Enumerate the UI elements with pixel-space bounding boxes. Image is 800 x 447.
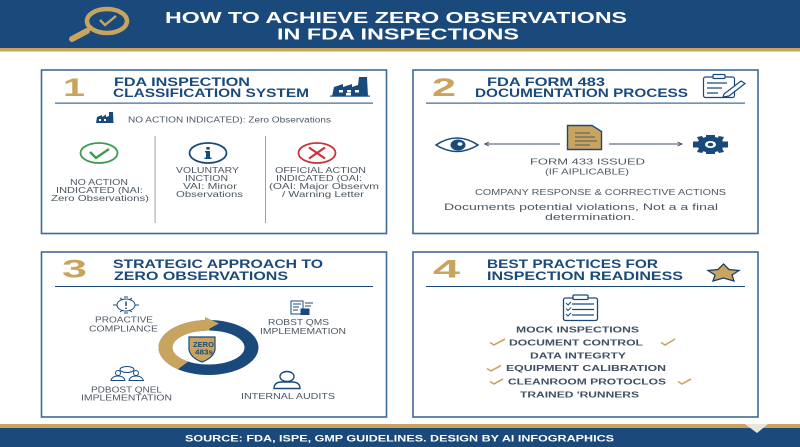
note text: [444, 202, 718, 222]
column: official action indicated: / Warning Letter: [282, 190, 364, 199]
heading 2: FDA FORM 483: [487, 77, 605, 89]
column: no action indicated: NO ACTION: [70, 178, 128, 187]
checklist items: DATA INTEGRTY: [530, 352, 627, 360]
title: [165, 10, 627, 44]
form issued label: (IF AIPLICABLE): [545, 168, 629, 176]
ring diagram with zero 483s shield: [158, 317, 258, 375]
label: proactive compliance: [89, 316, 158, 334]
icon: red cross: [298, 143, 336, 163]
icon: magnifying glass with check: [72, 9, 127, 39]
column: no action indicated: [51, 178, 149, 203]
column: voluntary action indicated: Observations: [176, 190, 243, 199]
label: robust QMS: ROBST QMS: [268, 318, 329, 327]
heading 2: [475, 77, 688, 100]
checklist items: EQUIPMENT CALIBRATION: [506, 364, 666, 373]
icon: star: [708, 264, 739, 281]
source line: SOURCE: FDA, ISPE, GMP GUIDELINES. DESIGN BY AI INFOGRAPHICS: [185, 434, 614, 444]
panel 4: best practices for inspection readiness: [413, 252, 758, 417]
checklist items: DOCUMENT CONTROL: [509, 338, 643, 348]
column: no action indicated: Zero Observations): [51, 194, 149, 203]
icon: people network: [111, 366, 144, 380]
heading 1: CLASSIFICATION SYSTEM: [113, 88, 309, 100]
checklist items: [506, 326, 667, 400]
icon: document: [568, 126, 602, 150]
heading 4: INSPECTION READINESS: [487, 271, 683, 283]
checklist items: TRAINED 'RUNNERS: [520, 390, 640, 400]
form issued label: [530, 156, 645, 176]
icon: proactive compliance gear: [113, 297, 139, 313]
icon: checklist clipboard: [564, 295, 598, 320]
label: people and quality: [81, 386, 172, 402]
arrow: to inspection: [484, 142, 560, 146]
column: official action indicated: [269, 166, 379, 199]
note text: Documents potential violations, Not a a final: [444, 202, 718, 212]
heading 1: FDA INSPECTION: [114, 77, 250, 89]
icon: person: [274, 372, 300, 388]
icon: factory: [330, 77, 370, 97]
panel 2: FDA form 483 documentation process: [413, 70, 758, 234]
checklist items: MOCK INSPECTIONS: [516, 326, 640, 334]
company response line: COMPANY RESPONSE & CORRECTIVE ACTIONS: [475, 188, 726, 197]
label: people and quality: PDBOST QNEL: [91, 386, 163, 394]
label: internal audits: INTERNAL AUDITS: [241, 392, 335, 401]
header banner: [0, 0, 800, 52]
title: HOW TO ACHIEVE ZERO OBSERVATIONS: [165, 10, 627, 27]
form issued label: FORM 433 ISSUED: [530, 156, 645, 166]
icon: gear: [693, 135, 728, 154]
icon: eye: [436, 138, 478, 152]
icon: QMS document: [291, 301, 313, 314]
number 2: 2: [432, 74, 456, 102]
gold check marks: [487, 339, 691, 384]
column: official action indicated: (OAI: Major Observm: [269, 182, 379, 191]
shield: ZERO: [193, 340, 214, 349]
icon: clipboard with pen: [704, 74, 745, 98]
heading 4: BEST PRACTICES FOR: [487, 259, 659, 271]
panel 1: FDA inspection classification system: [42, 70, 386, 234]
icon: blue info: [190, 143, 226, 163]
label: robust QMS: [260, 318, 346, 336]
title: IN FDA INSPECTIONS: [277, 26, 519, 44]
icon: small factory: [96, 112, 114, 123]
label: proactive compliance: PROACTIVE: [95, 316, 153, 324]
column: official action indicated: OFFICIAL ACTION: [275, 166, 366, 175]
column: official action indicated: INDICATED (OAI:: [276, 174, 362, 183]
column: voluntary action indicated: VAI: Minor: [183, 182, 237, 191]
checklist items: CLEANROOM PROTOCLOS: [508, 378, 667, 386]
heading 3: [113, 259, 323, 283]
number 3: 3: [62, 256, 87, 284]
summary line: NO ACTION INDICATED): Zero Observations: [128, 116, 331, 124]
number 1: 1: [63, 74, 85, 102]
number 4: 4: [433, 256, 460, 284]
column: no action indicated: INDICATED (NAI:: [56, 186, 143, 195]
column: voluntary action indicated: [176, 166, 243, 199]
heading 1: [113, 77, 309, 100]
shield: [189, 337, 215, 362]
heading 3: ZERO OBSERVATIONS: [114, 271, 288, 283]
arrow: to process: [609, 142, 682, 146]
panel 3: strategic approach to zero observations: [42, 252, 386, 417]
note text: determination.: [545, 212, 635, 222]
heading 4: [487, 259, 683, 283]
heading 3: STRATEGIC APPROACH TO: [113, 259, 323, 271]
label: people and quality: IMPLEMENTATION: [81, 394, 172, 402]
column: voluntary action indicated: INCTION: [185, 174, 228, 183]
heading 2: DOCUMENTATION PROCESS: [475, 88, 688, 100]
label: robust QMS: IMPLEMEMATION: [260, 327, 346, 336]
shield: 483s: [195, 348, 213, 356]
icon: green check: [80, 143, 118, 163]
footer bar: [0, 424, 800, 447]
column: voluntary action indicated: VOLUNTARY: [176, 166, 240, 175]
label: proactive compliance: COMPLIANCE: [89, 324, 158, 334]
